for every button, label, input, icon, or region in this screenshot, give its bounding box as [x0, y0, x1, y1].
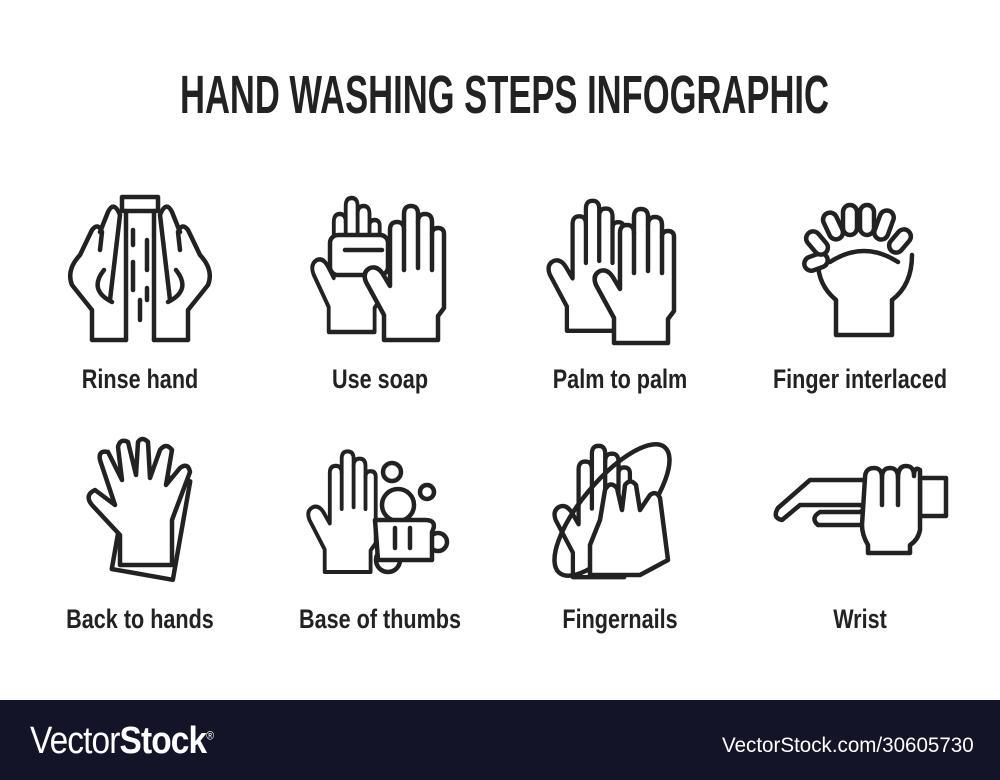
label: finger interlaced: Finger interlaced — [773, 364, 947, 394]
label: fingernails: Fingernails — [562, 604, 678, 634]
label: rinse hand: Rinse hand — [82, 364, 198, 394]
icon: use soap — [312, 198, 444, 340]
label: palm to palm: Palm to palm — [553, 364, 687, 394]
footer bar — [0, 700, 1000, 780]
icon: rinse hand — [70, 197, 210, 340]
label: back to hands: Back to hands — [66, 604, 214, 634]
label: base of thumbs: Base of thumbs — [299, 604, 461, 634]
icon: back to hands — [89, 439, 190, 580]
title: HAND WASHING STEPS INFOGRAPHIC — [180, 65, 829, 125]
icon: wrist — [776, 466, 946, 553]
icon: finger interlaced — [802, 205, 914, 335]
icon: base of thumbs — [308, 451, 447, 572]
label: wrist: Wrist — [833, 604, 887, 634]
footer url: VectorStock.com/30605730 — [722, 734, 974, 757]
footer logo: VectorStock® — [30, 720, 213, 762]
icon: palm to palm — [549, 201, 674, 343]
label: use soap: Use soap — [332, 364, 428, 394]
icon: fingernails — [536, 428, 688, 592]
